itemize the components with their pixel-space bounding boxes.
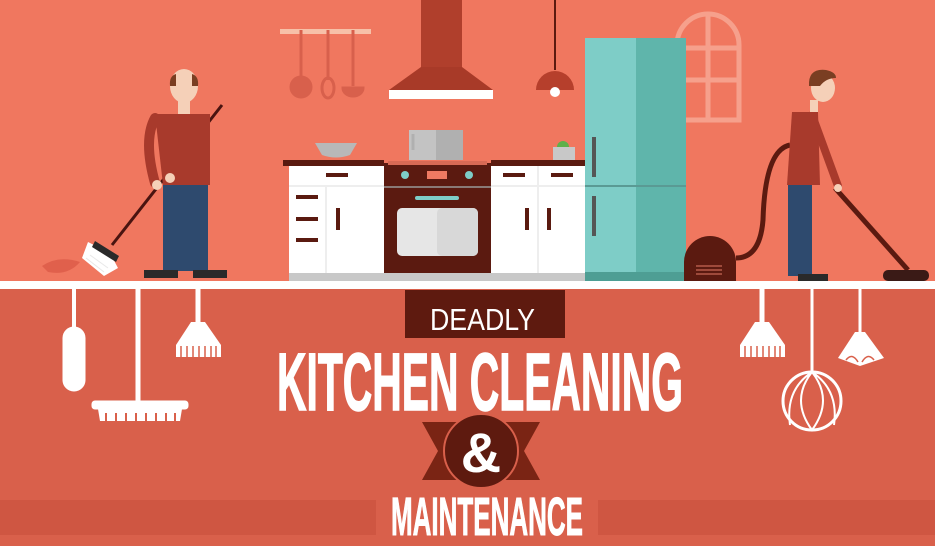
- lower background: [0, 284, 935, 546]
- floor line: [0, 281, 935, 289]
- tool: whisk: [783, 289, 841, 430]
- title: DEADLY: [405, 290, 565, 338]
- infographic canvas: MAINTENANCE: [391, 487, 583, 546]
- bowl: [315, 143, 357, 158]
- tool: bottle brush: [64, 289, 84, 390]
- pendant lamp: [536, 0, 574, 97]
- right man vacuuming: [787, 70, 929, 281]
- window: [677, 14, 739, 120]
- tool: broom left: [176, 289, 221, 357]
- tool: broom right: [740, 289, 785, 357]
- range hood: [389, 0, 493, 99]
- left man sweeping: [42, 69, 227, 278]
- pot: [409, 130, 463, 160]
- vacuum cleaner: [684, 145, 790, 284]
- maintenance box: [376, 500, 598, 535]
- fridge: [585, 38, 686, 281]
- plant pot: [553, 141, 575, 160]
- bottom band: [0, 500, 935, 535]
- hanging tools right: [740, 289, 884, 430]
- title: DEADLY: DEADLY: [430, 302, 535, 337]
- oven: [384, 161, 491, 281]
- wall background: [0, 0, 935, 284]
- tool: floor mop: [92, 289, 188, 421]
- ribbon with ampersand: &: [461, 421, 501, 484]
- right cabinets: [491, 160, 585, 281]
- left cabinets: [283, 160, 384, 281]
- ribbon with ampersand: [422, 414, 540, 488]
- utensil rack: [280, 29, 371, 98]
- tool: scrub brush: [838, 289, 884, 366]
- hanging tools left: [64, 289, 221, 421]
